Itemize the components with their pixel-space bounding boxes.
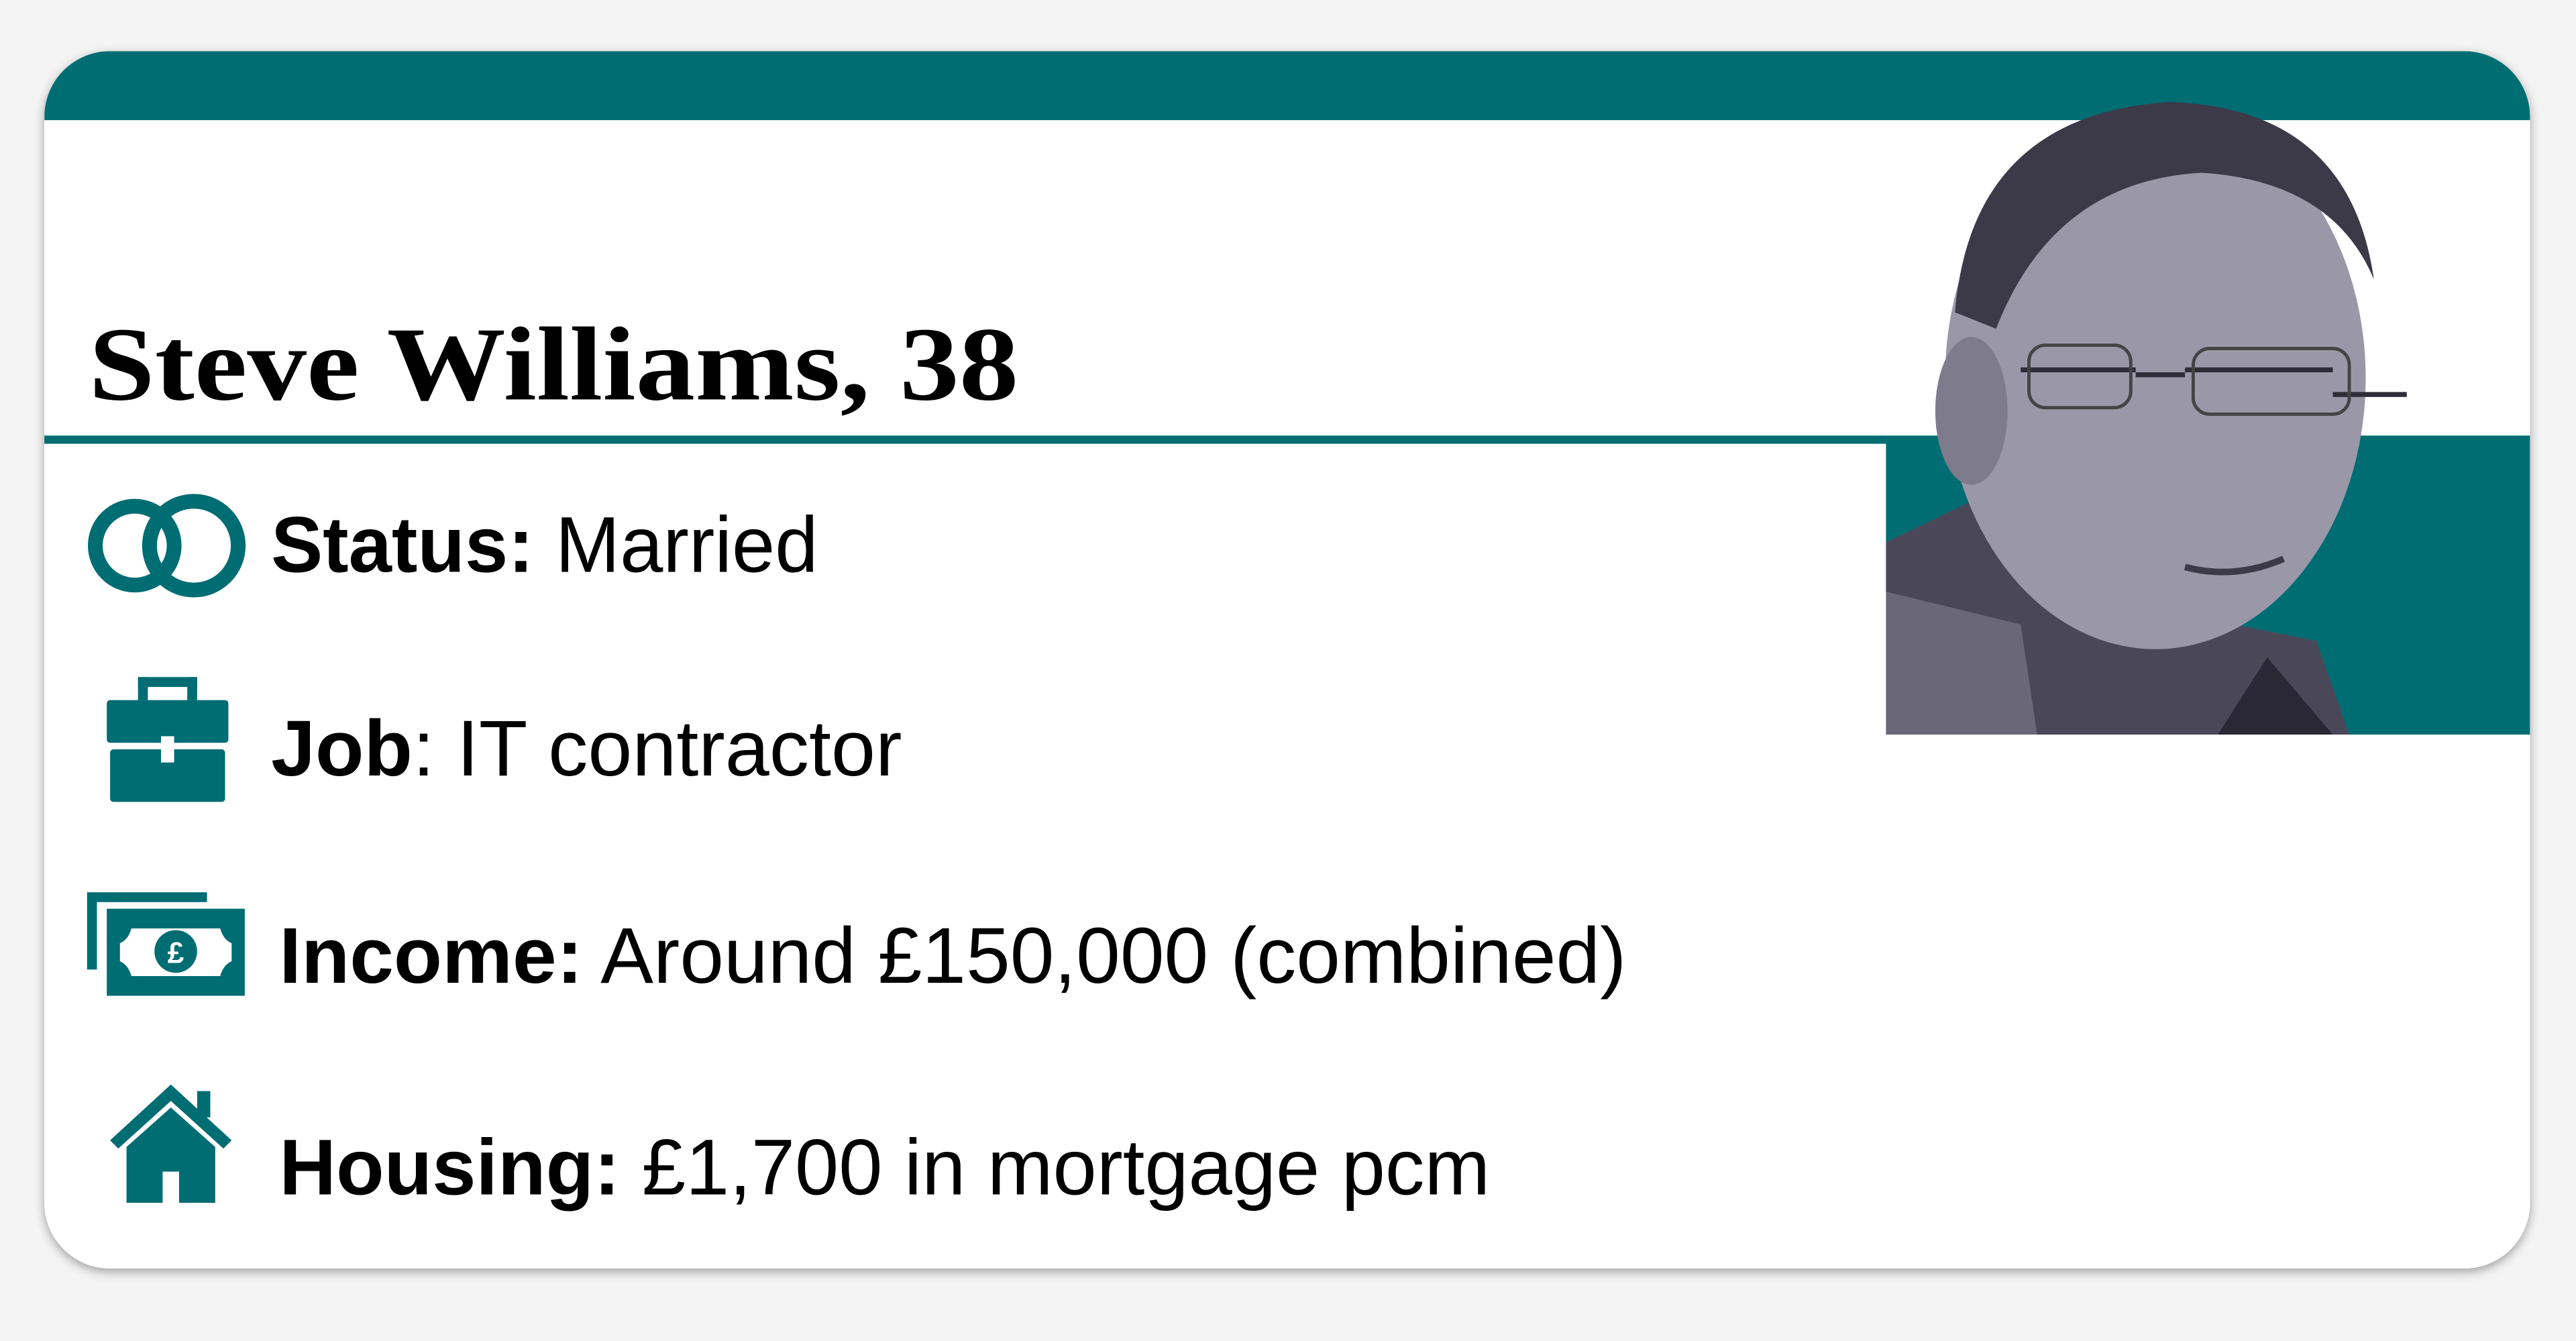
title underline bbox=[44, 435, 1886, 444]
icon: briefcase bbox=[107, 677, 228, 802]
job text: Job: IT contractor bbox=[271, 704, 902, 792]
icon: banknotes bbox=[87, 892, 245, 996]
housing text: Housing: £1,700 in mortgage pcm bbox=[279, 1124, 1490, 1212]
icon: house bbox=[110, 1085, 231, 1203]
status text: Status: Married bbox=[271, 501, 818, 589]
header bar bbox=[44, 51, 2530, 120]
photo: portrait bbox=[1886, 102, 2407, 735]
icon: banknotes: £ bbox=[168, 936, 184, 969]
income text: Income: Around £150,000 (combined) bbox=[279, 912, 1626, 1000]
icon: rings bbox=[95, 501, 238, 590]
title: Steve Williams, 38 bbox=[89, 305, 1018, 422]
photo backdrop bbox=[1886, 435, 2530, 735]
